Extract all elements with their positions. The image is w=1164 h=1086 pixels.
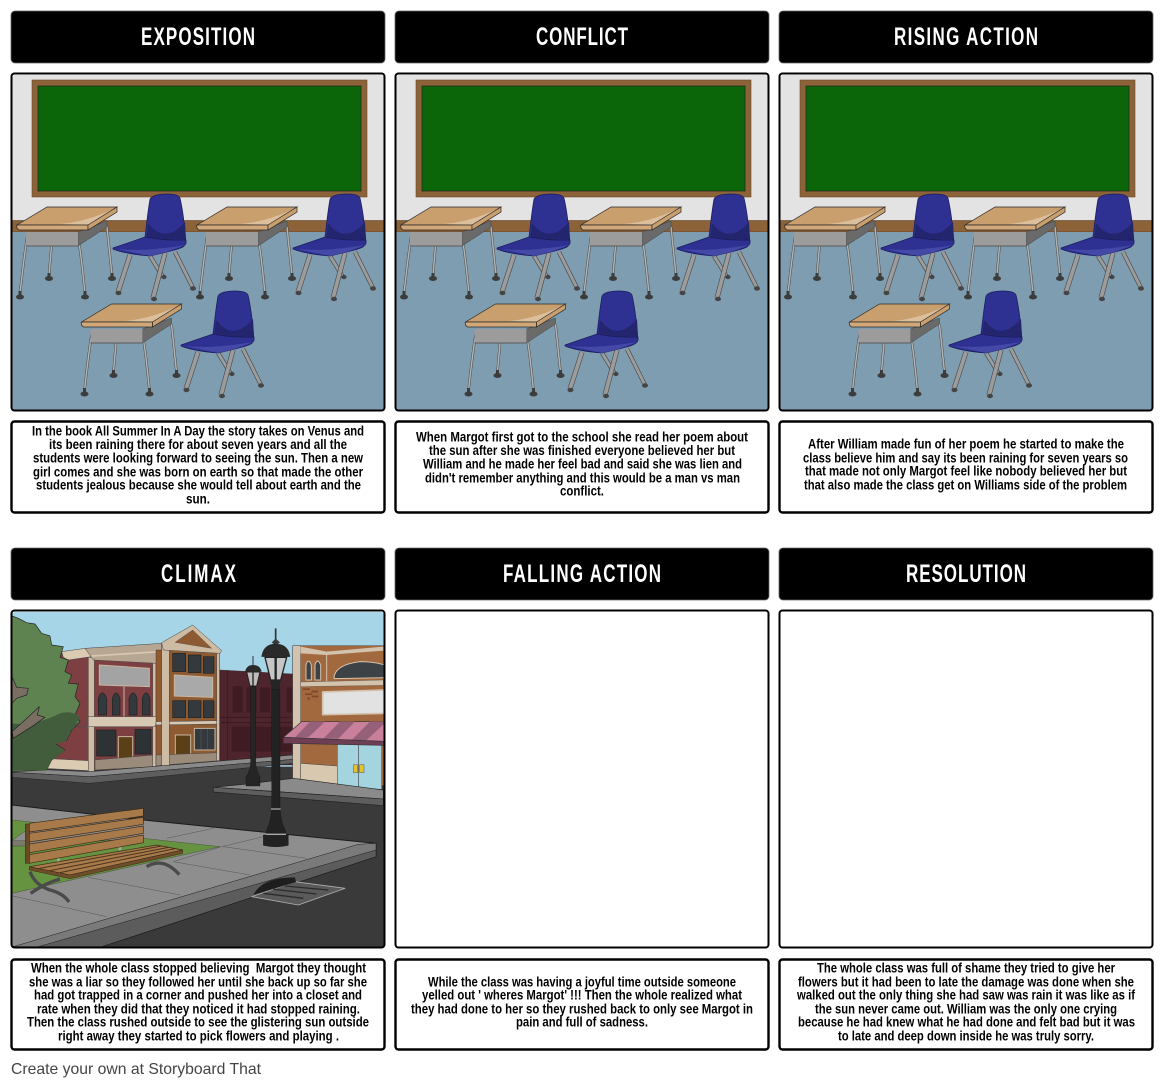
text block: exposition: sun. xyxy=(186,491,210,506)
text block: resolution: to late and deep down inside he was truly sorry. xyxy=(838,1028,1094,1043)
corner shop xyxy=(293,646,386,789)
text block: exposition: students were looking forward to seeing the sun. Then a new xyxy=(33,450,363,465)
far building xyxy=(220,670,293,765)
text block: falling action: While the class was having a joyful time outside someone xyxy=(428,974,736,989)
text block: conflict: William and he made her feel bad and said she was lien and xyxy=(423,456,742,471)
right sidewalk xyxy=(213,778,383,799)
text block: climax: she was a liar so they followed her until she back up so far she xyxy=(29,974,367,989)
red building xyxy=(43,643,162,772)
text block: falling action: they had done to her so they rushed back to only see Margot in xyxy=(411,1001,753,1016)
text block: exposition: girl comes and she was born on earth so that made the other xyxy=(33,464,364,479)
text block: resolution xyxy=(780,960,1152,1050)
heading: resolution: RESOLUTION xyxy=(906,560,1026,588)
heading: exposition: EXPOSITION xyxy=(141,23,255,51)
text block: climax: When the whole class stopped believing Margot they thought xyxy=(31,960,366,975)
text block: conflict: conflict. xyxy=(560,483,604,498)
heading: conflict xyxy=(395,11,769,63)
text block: falling action: yelled out ' wheres Margot' !!! Then the whole realized what xyxy=(422,987,742,1002)
sky xyxy=(12,612,384,767)
text block: conflict: When Margot first got to the school she read her poem about xyxy=(416,429,748,444)
text block: exposition: students jealous because she would tell about earth and the xyxy=(36,477,361,492)
grass xyxy=(12,820,220,893)
heading: climax xyxy=(11,548,385,600)
text block: conflict: the sun after she was finished everyone believed her but xyxy=(429,443,735,458)
heading: falling action xyxy=(395,548,769,600)
text block: climax: right away they started to pick flowers and playing . xyxy=(58,1028,339,1043)
heading: climax: CLIMAX xyxy=(161,560,237,588)
text block: conflict: didn't remember anything and this would be a man vs man xyxy=(425,470,740,485)
text block: resolution: The whole class was full of shame they tried to give her xyxy=(817,960,1116,975)
text block: rising action xyxy=(780,422,1152,512)
panel: rising action classroom xyxy=(779,74,1153,411)
heading: conflict: CONFLICT xyxy=(536,23,628,51)
panel: climax street scene xyxy=(10,610,386,948)
text block: exposition: In the book All Summer In A Day the story takes on Venus and xyxy=(32,423,364,438)
far lamp xyxy=(245,656,262,786)
heading: falling action: FALLING ACTION xyxy=(503,560,661,588)
awning xyxy=(283,722,384,745)
text block: exposition xyxy=(12,422,384,512)
text block: climax: Then the class rushed outside to see the glistering sun outside xyxy=(27,1014,369,1029)
panel: exposition classroom xyxy=(11,74,385,411)
bench xyxy=(25,808,183,902)
text block: climax xyxy=(12,960,384,1050)
text block: exposition: its been raining there for about seven years and all the xyxy=(49,437,347,452)
text block: climax: had got trapped in a corner and pushed her into a closet and xyxy=(34,987,362,1002)
panel: conflict classroom xyxy=(395,74,769,411)
heading: exposition xyxy=(11,11,385,63)
heading: rising action xyxy=(779,11,1153,63)
text block: falling action xyxy=(396,960,768,1050)
upper sidewalk xyxy=(12,755,293,777)
tree xyxy=(12,616,80,772)
text block: falling action: pain and full of sadness. xyxy=(516,1014,648,1029)
text block: climax: rate when they did that they noticed it had stopped raining. xyxy=(37,1001,360,1016)
panel: resolution empty xyxy=(780,610,1152,948)
road xyxy=(10,767,385,948)
brown building xyxy=(156,625,222,766)
panel: falling action empty xyxy=(396,610,768,948)
heading: resolution xyxy=(779,548,1153,600)
heading: rising action: RISING ACTION xyxy=(894,23,1038,51)
text block: conflict xyxy=(396,422,768,512)
foreground sidewalk xyxy=(12,805,376,947)
main lamp post xyxy=(262,628,290,847)
drain xyxy=(252,877,345,905)
footer credit: Create your own at Storyboard That xyxy=(11,1061,262,1078)
